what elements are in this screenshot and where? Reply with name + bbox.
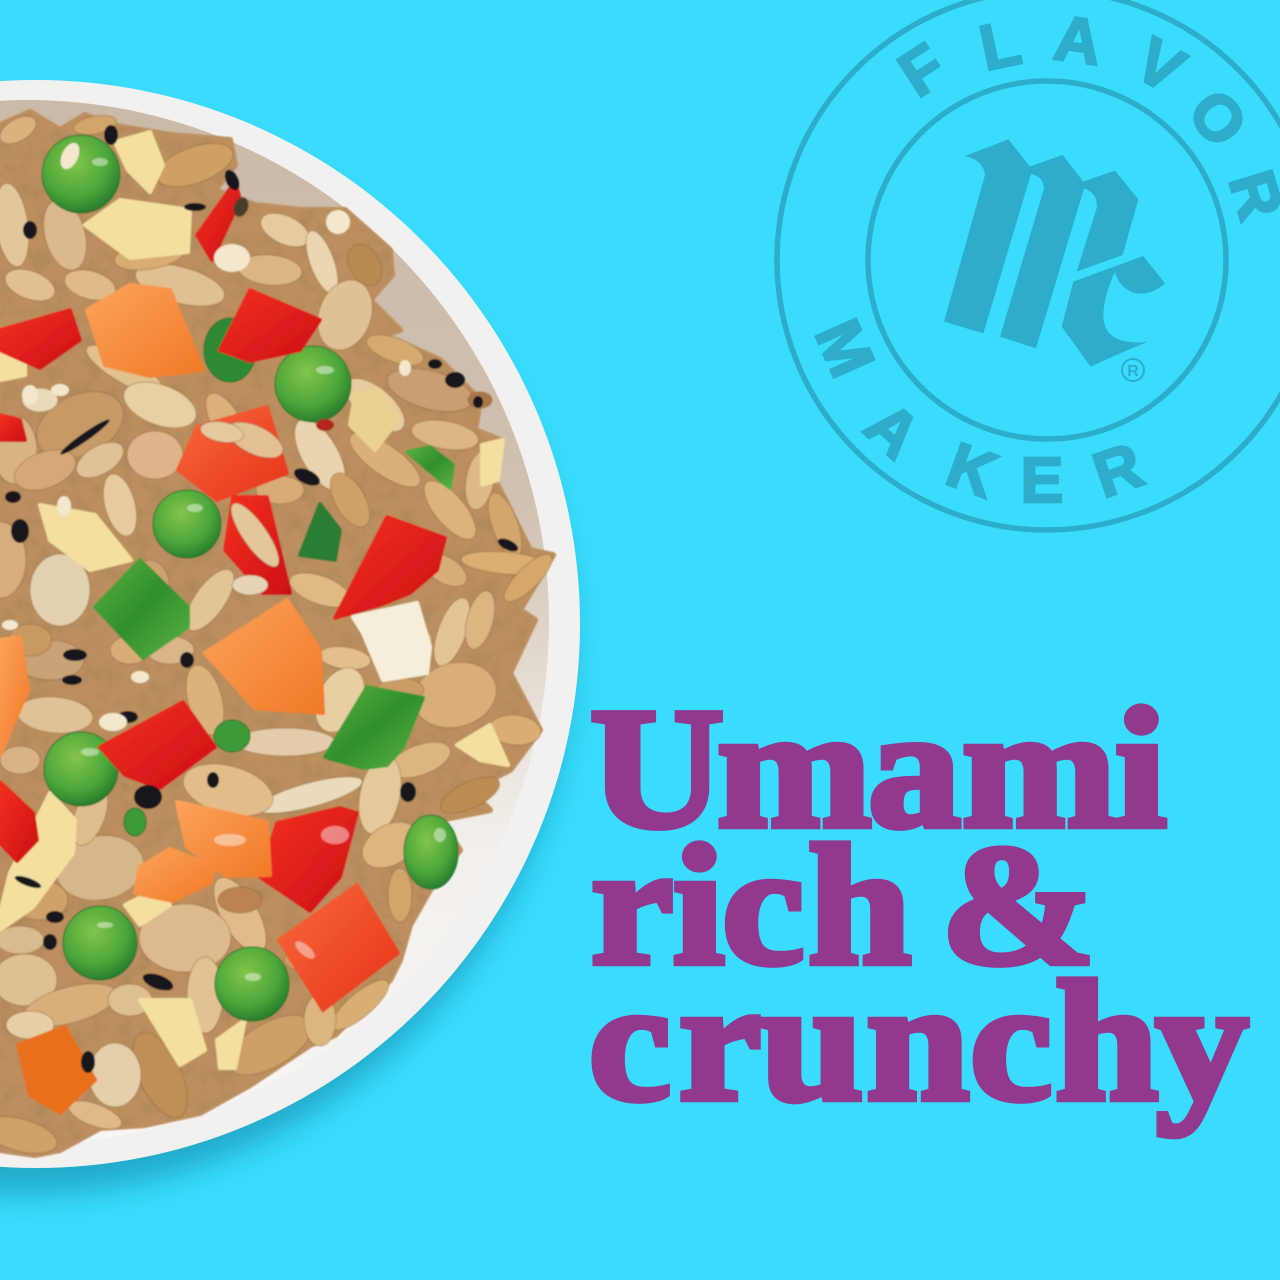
logo text: FLAVOR: F [886, 29, 958, 111]
headline [589, 672, 1248, 1136]
logo inner ring [868, 81, 1226, 439]
rice bed [0, 112, 553, 1155]
plate shadow [0, 106, 570, 1194]
green onions [95, 447, 453, 768]
registered mark: R [1127, 363, 1139, 380]
registered mark [1122, 359, 1144, 381]
red peppers [0, 182, 445, 1010]
plate [0, 80, 580, 1168]
logo text: MAKER: A [852, 388, 934, 472]
carrots [0, 285, 323, 1113]
rice grains [0, 110, 558, 1160]
black sesame seeds [5, 125, 520, 1073]
headline line 2: rich & [591, 809, 1095, 1000]
logo text: MAKER: M [801, 309, 889, 387]
logo monogram: Mc [944, 139, 1165, 367]
rice texture [0, 127, 529, 1140]
headline line 1: Umami [590, 672, 1167, 863]
logo outer ring [777, 0, 1280, 530]
peas [42, 135, 458, 1021]
logo text: MAKER: K [938, 428, 1006, 512]
logo text: FLAVOR: L [973, 6, 1027, 84]
food: fried rice [0, 100, 560, 1170]
logo text: MAKER [801, 309, 1152, 516]
logo text: MAKER: R [1084, 428, 1152, 512]
logo text: FLAVOR [886, 1, 1280, 228]
scrambled egg pieces [0, 132, 508, 1068]
headline line 3: crunchy [589, 945, 1248, 1136]
logo text: FLAVOR: O [1174, 76, 1262, 160]
logo text: FLAVOR: V [1124, 23, 1197, 107]
white sesame seeds [2, 140, 411, 731]
glossy highlights [81, 158, 446, 981]
grains over vegetables [199, 415, 288, 595]
logo: Flavor Maker seal [777, 0, 1280, 530]
logo text: FLAVOR: A [1050, 1, 1106, 79]
logo text: MAKER: E [1021, 444, 1063, 516]
